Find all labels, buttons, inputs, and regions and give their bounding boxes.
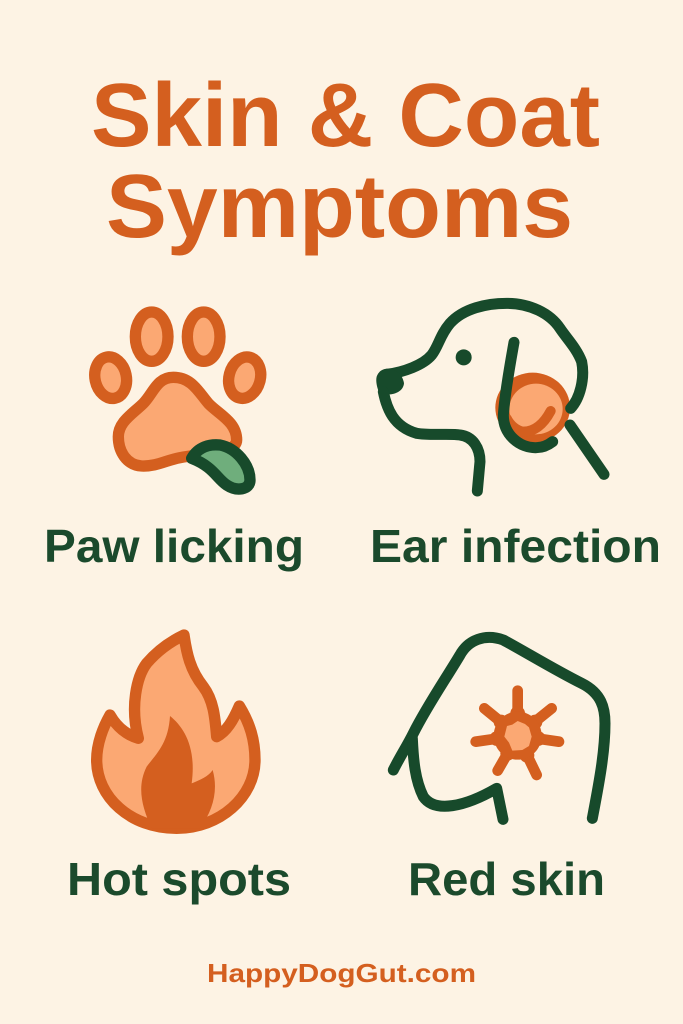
title: Skin & Coat <box>91 66 600 166</box>
label: hot spots: Hot spots <box>67 853 291 905</box>
label: ear infection: Ear infection <box>370 520 661 572</box>
title: Symptoms <box>106 157 573 257</box>
label: red skin: Red skin <box>408 853 605 905</box>
footer website: HappyDogGut.com <box>207 958 476 988</box>
title <box>91 66 600 257</box>
icon: paw with tongue <box>91 312 265 489</box>
icon: dog head with ear infection <box>376 303 604 491</box>
icon: flame <box>97 635 255 828</box>
label: paw licking: Paw licking <box>44 520 304 572</box>
icon: dog body with red skin spot <box>393 637 605 819</box>
